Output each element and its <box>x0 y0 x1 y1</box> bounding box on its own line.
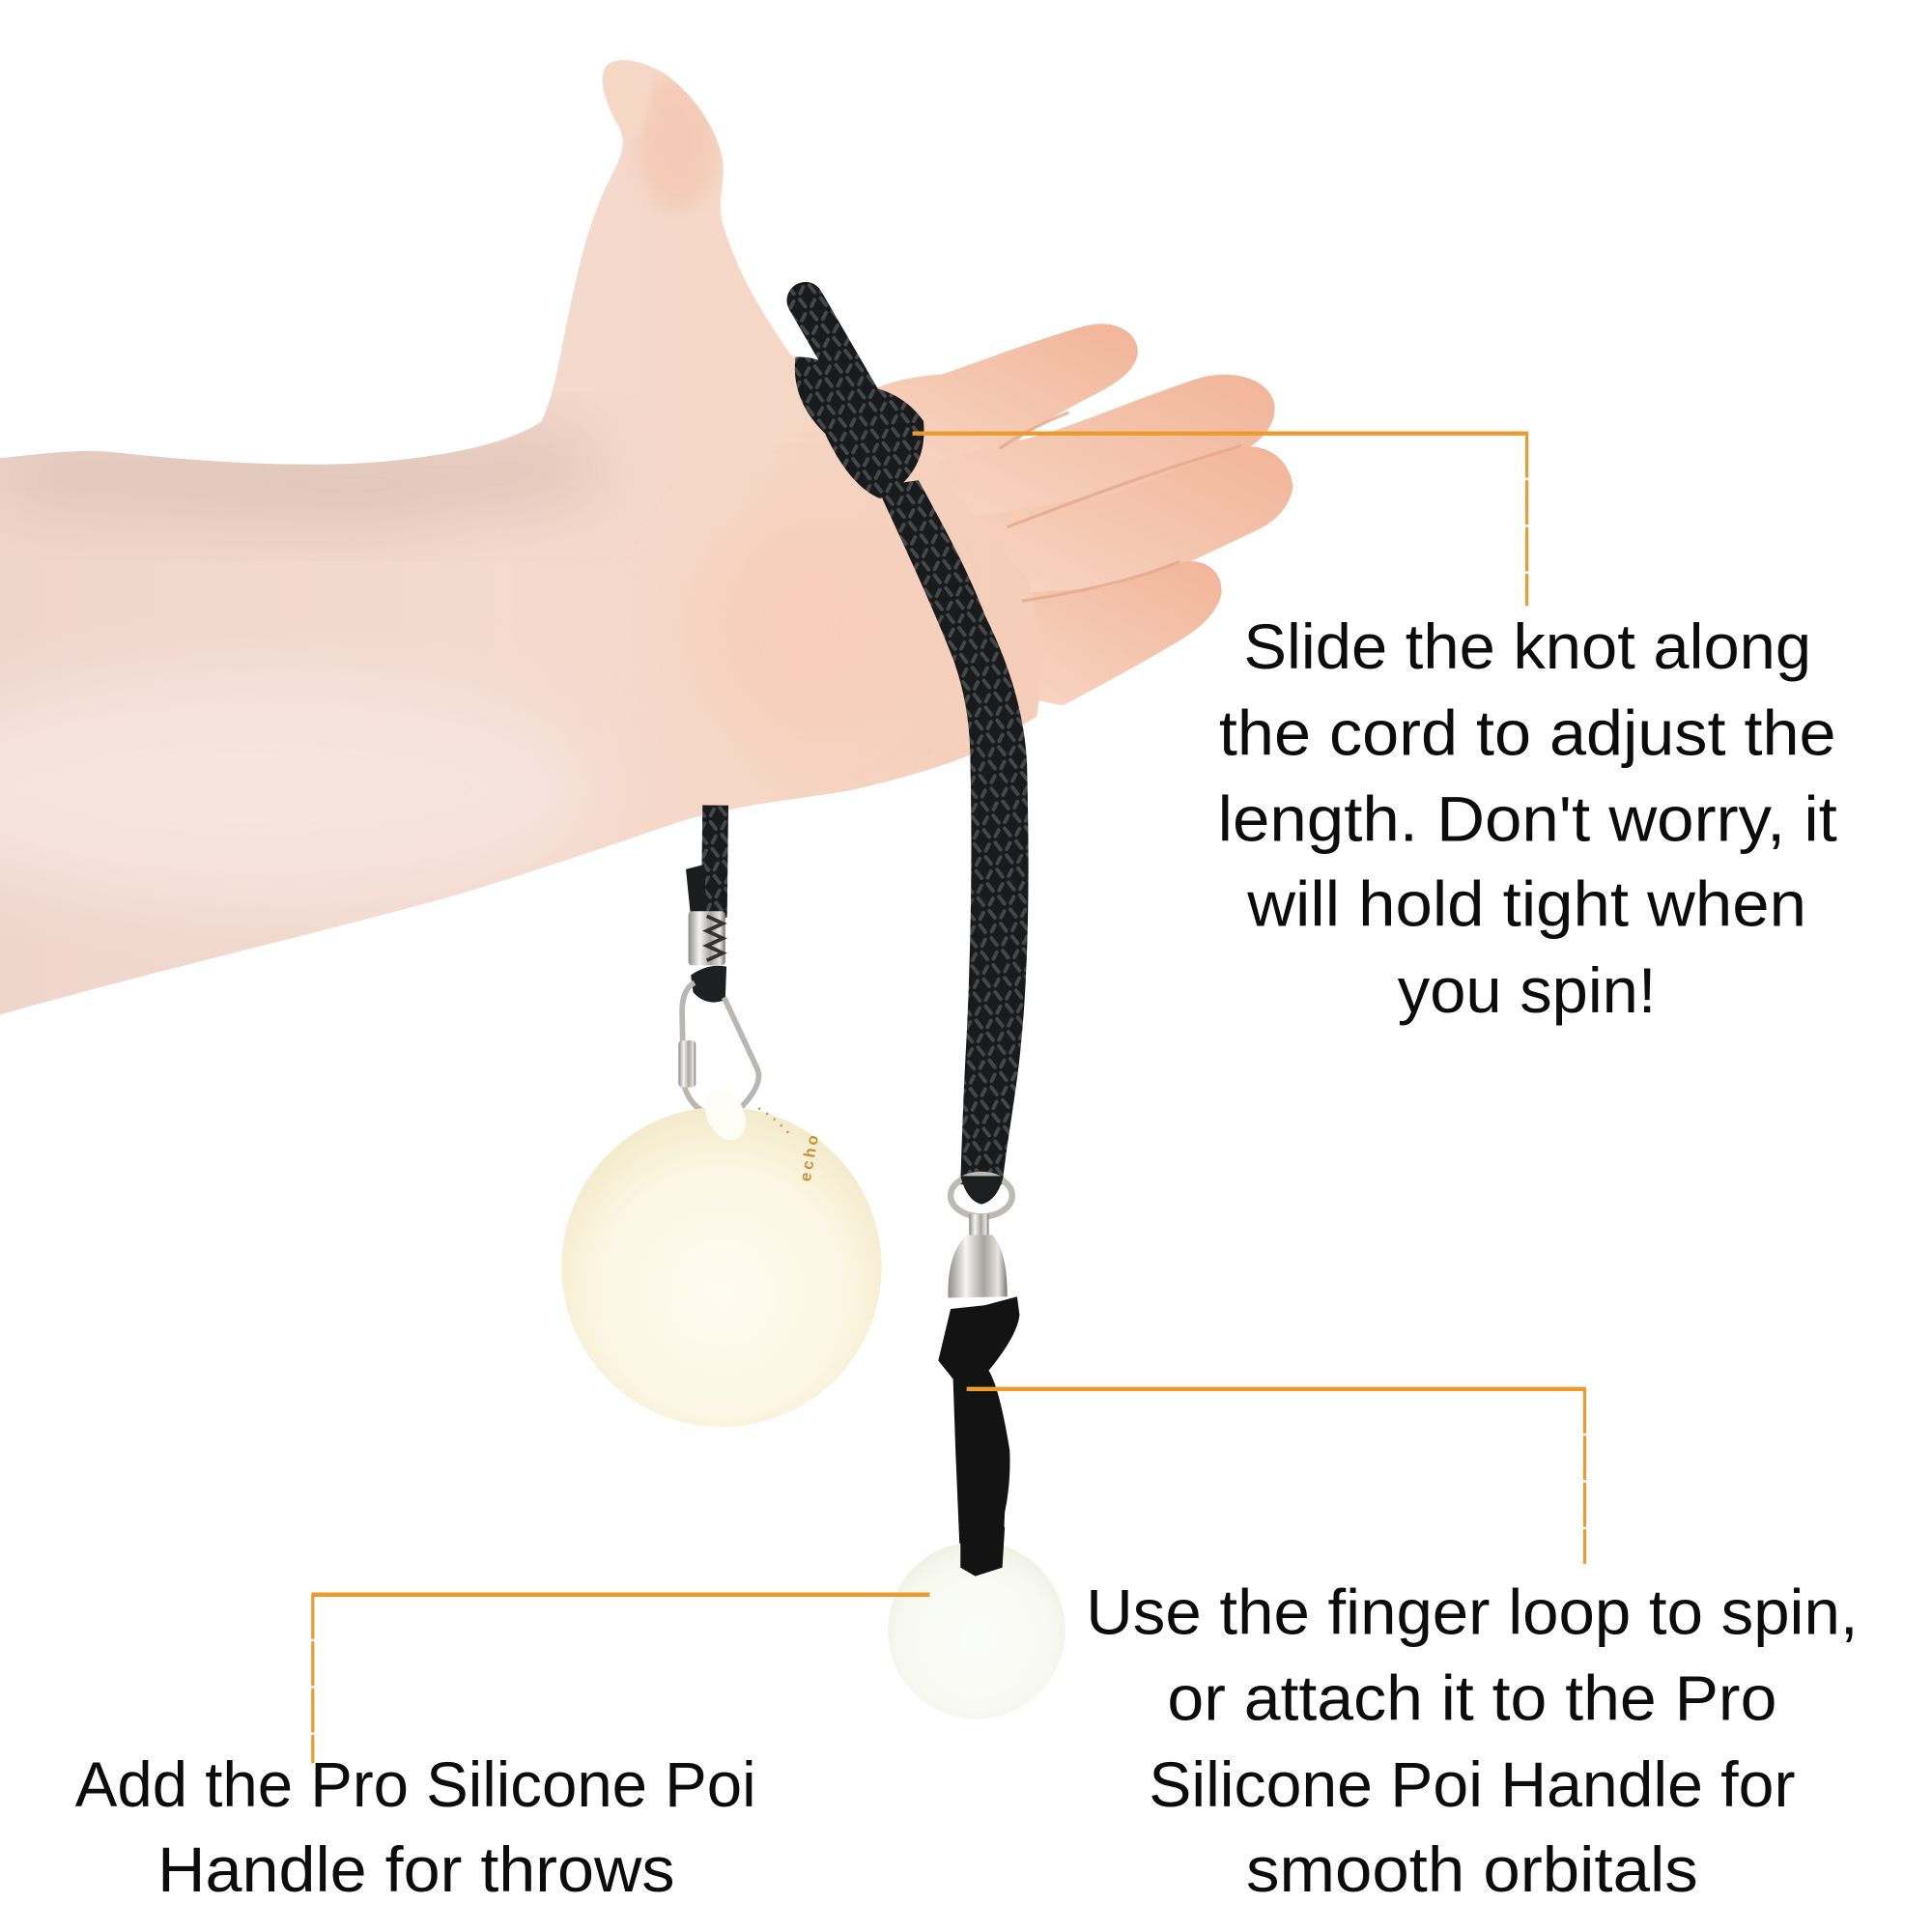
text block: slide the knot: will hold tight when <box>1246 869 1806 941</box>
text block: slide the knot <box>1218 611 1837 1027</box>
callout connector: handle <box>311 1595 929 1763</box>
text block: finger loop <box>1086 1577 1859 1906</box>
cord knot under crimp <box>691 966 726 1003</box>
middle finger <box>936 375 1275 542</box>
text block: finger loop: Silicone Poi Handle for <box>1149 1749 1796 1821</box>
finger loop fabric <box>938 1296 1019 1577</box>
cord tail tag <box>686 865 707 918</box>
hand and forearm photo <box>0 60 1293 1014</box>
main cord with knot <box>795 300 1029 1184</box>
index finger <box>862 324 1138 468</box>
knot <box>795 356 923 498</box>
text block: handle for throws <box>75 1749 756 1906</box>
cord end <box>960 1176 1004 1205</box>
skin shading <box>0 73 911 899</box>
text block: slide the knot: Slide the knot along <box>1243 611 1811 683</box>
text block: handle for throws: Handle for throws <box>157 1834 675 1906</box>
ball logo dots <box>758 1108 790 1135</box>
text block: finger loop: or attach it to the Pro <box>1167 1663 1776 1735</box>
text block: slide the knot: the cord to adjust the <box>1219 697 1836 769</box>
carabiner <box>682 982 758 1116</box>
swivel ring <box>951 1175 1012 1216</box>
swivel bell <box>948 1236 1008 1298</box>
swivel neck <box>969 1214 989 1241</box>
main cord <box>877 480 1029 1184</box>
big silicone ball <box>561 1082 882 1427</box>
swivel hardware <box>948 1175 1012 1298</box>
callout connector: finger loop <box>967 1389 1586 1564</box>
text block: finger loop: Use the finger loop to spin, <box>1086 1577 1859 1649</box>
thumbnail <box>606 66 650 140</box>
silicone ring <box>697 1082 753 1147</box>
text block: slide the knot: you spin! <box>1398 955 1656 1027</box>
palm and forearm <box>0 60 1040 1014</box>
little finger <box>985 561 1222 705</box>
finger base fill <box>887 407 1059 615</box>
small cord to big ball <box>686 806 726 1003</box>
metal crimp <box>689 911 725 965</box>
carabiner screw sleeve <box>678 1040 696 1088</box>
cord segment <box>714 806 716 918</box>
small silicone ball <box>888 1527 1065 1719</box>
text block: slide the knot: length. Don't worry, it <box>1218 784 1837 856</box>
callout connector: knot <box>913 434 1528 606</box>
ring finger <box>973 446 1293 610</box>
cord tail <box>806 300 868 409</box>
finger gaps <box>1000 412 1241 601</box>
fabric end on ball <box>960 1527 1005 1577</box>
text block: handle for throws: Add the Pro Silicone Poi <box>75 1749 756 1821</box>
text block: finger loop: smooth orbitals <box>1246 1834 1698 1906</box>
ball logo text: echo <box>796 1130 823 1182</box>
